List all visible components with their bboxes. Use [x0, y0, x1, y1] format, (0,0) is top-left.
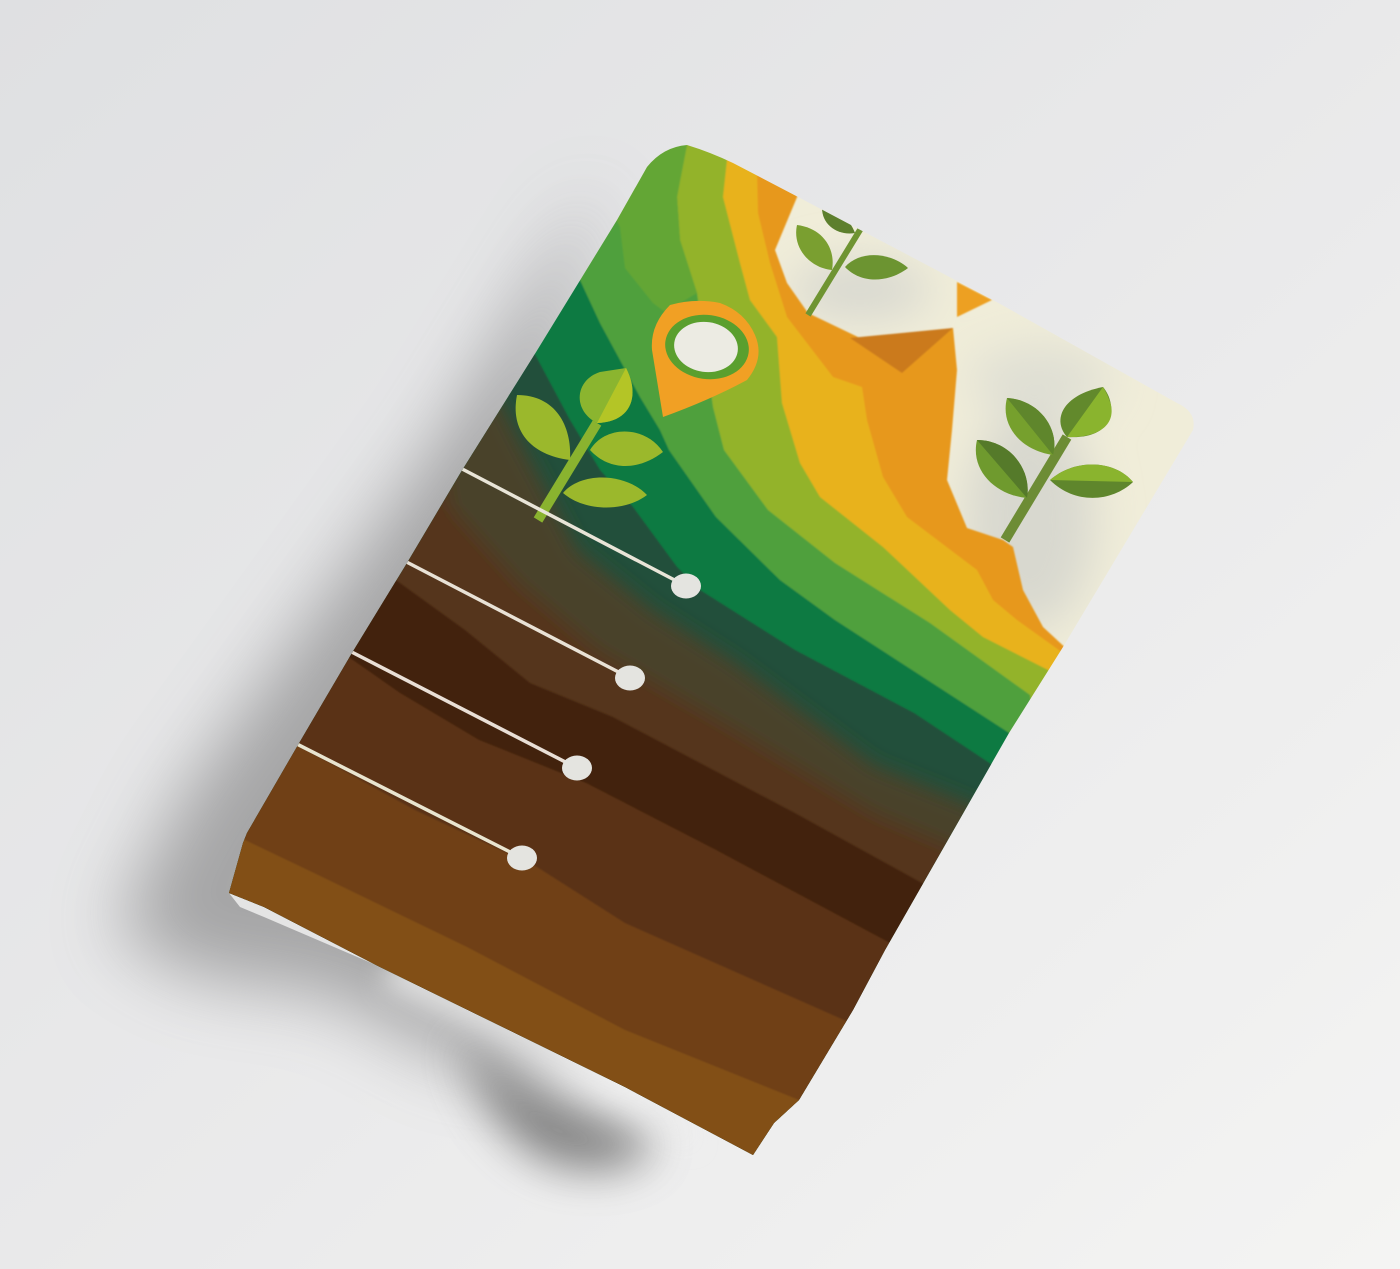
callout line 2 — [395, 556, 645, 690]
cream shading — [790, 260, 1110, 630]
callout line 3 — [340, 646, 592, 780]
callout line 1 — [462, 468, 701, 598]
orange hill layer — [756, 175, 1064, 652]
mid brown soil band — [244, 746, 846, 1100]
lime band — [676, 145, 1048, 700]
brown soil band — [299, 658, 889, 1021]
blended olive and brown bands — [229, 398, 972, 1155]
plant: right large sprout — [976, 387, 1133, 540]
card shadow — [115, 180, 700, 1169]
golden yellow layer — [722, 160, 1060, 670]
bottom brown soil band — [229, 840, 798, 1155]
callout line 4 — [285, 738, 537, 870]
dark orange facet — [850, 328, 953, 373]
light paper edge under card — [229, 893, 376, 965]
darkest soil band — [349, 580, 924, 943]
map pin marker — [652, 301, 759, 417]
dark green band — [397, 280, 1009, 882]
deep teal band — [229, 354, 992, 1155]
mid green band — [580, 220, 1031, 734]
card — [229, 145, 1194, 1155]
plant: top centre sprout — [796, 208, 908, 315]
cream background layer — [509, 197, 1194, 646]
plant: left green sprout — [516, 368, 663, 520]
upper green patch — [616, 145, 696, 312]
orange triangle — [957, 282, 992, 317]
